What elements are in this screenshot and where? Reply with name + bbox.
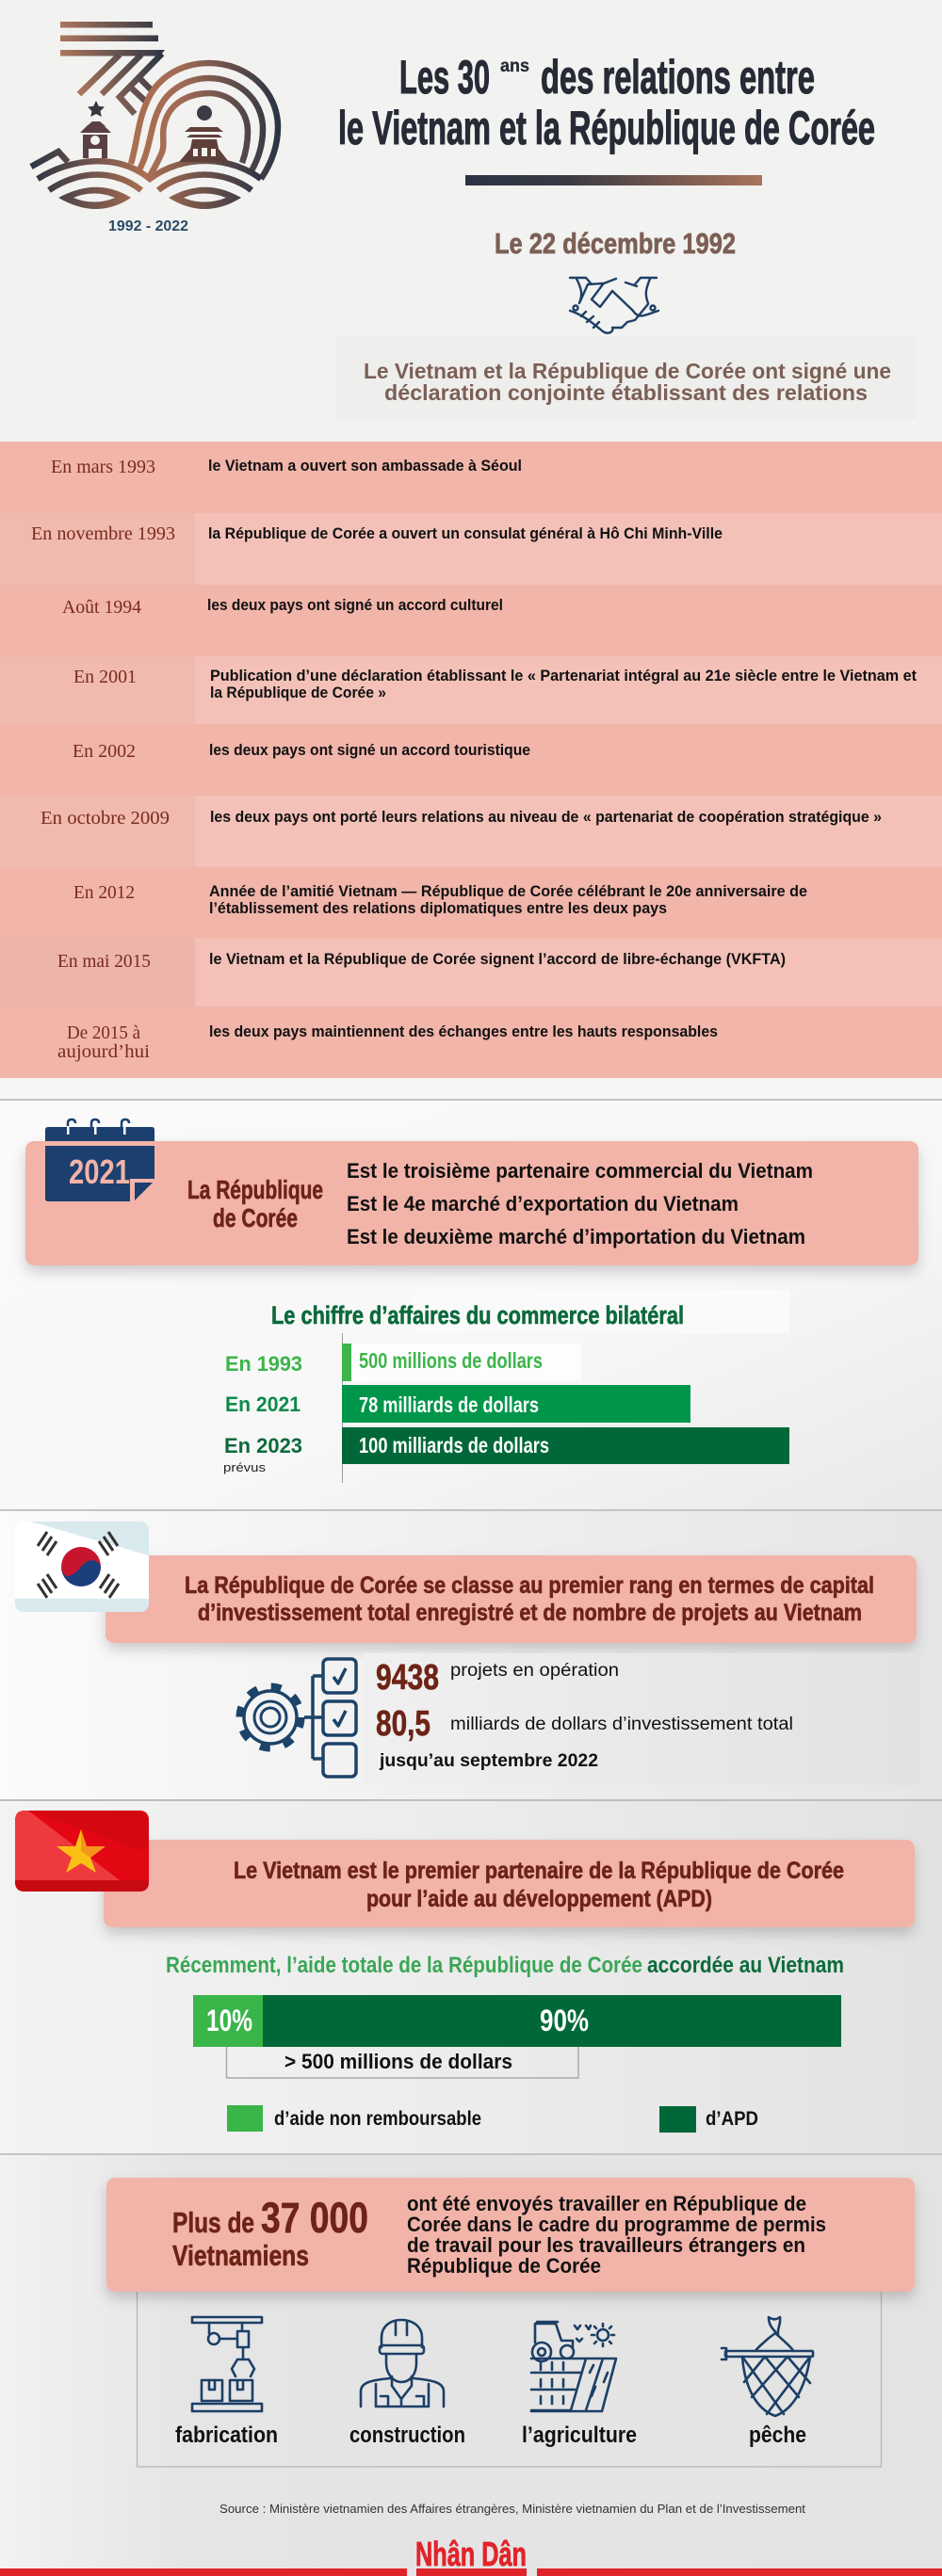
bar: 1993: 500 millions de dollars bbox=[359, 1348, 543, 1373]
legend: ODA bbox=[659, 2106, 758, 2133]
logo: 30th anniversary emblem bbox=[31, 22, 278, 234]
icon: gear and checklist bbox=[239, 1659, 356, 1777]
panel: development aid bbox=[104, 1840, 915, 1927]
timeline: 2001: la République de Corée » bbox=[210, 684, 386, 701]
timeline: 2012: l’établissement des relations diplomatiques entre les deux pays bbox=[209, 899, 667, 917]
title: Les 30 bbox=[399, 51, 490, 104]
timeline: 1993 novembre: En novembre 1993 bbox=[31, 523, 175, 544]
legend: non-refundable aid bbox=[227, 2105, 481, 2132]
chart: aid split bbox=[166, 1953, 844, 2133]
timeline: 2012: Année de l’amitié Vietnam — République de Corée célébrant le 20e anniversaire de bbox=[209, 882, 807, 900]
stat: 9438 projects bbox=[376, 1658, 619, 1698]
timeline: today: De 2015 à bbox=[67, 1022, 140, 1043]
timeline: 2002 bbox=[73, 741, 530, 762]
logo: clock tower bbox=[80, 121, 111, 158]
bar: 2023: prévus bbox=[223, 1460, 267, 1474]
timeline: 1994: Août 1994 bbox=[62, 597, 141, 618]
timeline: 1993 mars: En mars 1993 bbox=[51, 457, 155, 477]
icon: Vietnamese flag bbox=[15, 1811, 149, 1892]
text: partner facts: Est le deuxième marché d’importation du Vietnam bbox=[347, 1225, 805, 1248]
source: Source : Ministère vietnamien des Affaires étrangères, Ministère vietnamien du Plan et de l’Investissement bbox=[219, 2502, 805, 2516]
heading: La République de Corée bbox=[187, 1175, 323, 1232]
logo: taegeuk bbox=[197, 105, 212, 121]
bar: 2021 bbox=[225, 1385, 690, 1423]
panel: timeline bbox=[0, 442, 942, 1078]
text: sector labels: l’agriculture bbox=[522, 2423, 637, 2448]
timeline: 2012: En 2012 bbox=[73, 882, 135, 903]
stat: 80,5 billions: 80,5 bbox=[376, 1704, 430, 1744]
title: ans bbox=[500, 56, 529, 76]
legend: ODA: d’APD bbox=[706, 2108, 758, 2130]
timeline: 1993 novembre bbox=[31, 523, 723, 544]
text: work permit programme: de travail pour les travailleurs étrangers en bbox=[407, 2233, 805, 2257]
bar: 2023 bbox=[223, 1427, 789, 1474]
icon: fishing net bbox=[722, 2317, 813, 2416]
heading: 37 000 Vietnamese: Vietnamiens bbox=[172, 2239, 309, 2272]
text: sector labels: pêche bbox=[749, 2423, 806, 2448]
bar: 1993: En 1993 bbox=[225, 1352, 302, 1376]
icon: fabrication bbox=[192, 2317, 262, 2411]
timeline: 2002: En 2002 bbox=[73, 741, 136, 762]
panel: declaration: déclaration conjointe établissant des relations bbox=[384, 380, 868, 405]
bar: 2021: 78 milliards de dollars bbox=[359, 1393, 539, 1417]
footer: Nhân Dân brand: Nhân Dân bbox=[415, 2535, 527, 2573]
bar: 2023: 100 milliards de dollars bbox=[359, 1433, 549, 1457]
text: sector labels: fabrication bbox=[175, 2423, 278, 2448]
bar: 2021: En 2021 bbox=[225, 1393, 300, 1416]
date heading: Le 22 décembre 1992 bbox=[495, 227, 736, 260]
bar: 90 percent: 90% bbox=[540, 2004, 589, 2037]
icon: construction worker bbox=[361, 2320, 444, 2407]
logo: years: 1992 - 2022 bbox=[108, 218, 188, 234]
chart title: Récemment, l’aide totale de la République de Corée bbox=[166, 1953, 642, 1978]
bar: 2023: En 2023 bbox=[224, 1434, 302, 1457]
text: partner facts: Est le troisième partenaire commercial du Vietnam bbox=[347, 1159, 813, 1183]
stat: 80,5 billions bbox=[376, 1704, 793, 1744]
timeline: 2015: le Vietnam et la République de Corée signent l’accord de libre-échange (VKFTA) bbox=[209, 950, 786, 968]
timeline: 2015: En mai 2015 bbox=[57, 951, 151, 972]
timeline: 2001 bbox=[73, 667, 917, 701]
timeline: 2001: Publication d’une déclaration établissant le « Partenariat intégral au 21e siècle entre le Vietnam et bbox=[210, 667, 917, 684]
bar: 1993 bbox=[225, 1344, 543, 1381]
panel: declaration bbox=[336, 337, 916, 419]
timeline: 2009 bbox=[41, 808, 882, 829]
bar: 10 percent: 10% bbox=[206, 2004, 252, 2037]
text: partner facts: Est le 4e marché d’exportation du Vietnam bbox=[347, 1192, 739, 1216]
timeline: 2009: les deux pays ont porté leurs relations au niveau de « partenariat de coopération stratégique » bbox=[210, 808, 882, 826]
timeline: 2012 bbox=[73, 882, 807, 917]
timeline: 2001: En 2001 bbox=[73, 667, 137, 687]
bracket: amount bbox=[226, 2047, 578, 2078]
text: work permit programme: République de Corée bbox=[407, 2254, 601, 2278]
stat: date: jusqu’au septembre 2022 bbox=[379, 1751, 598, 1771]
icon: calendar 2021: 2021 bbox=[69, 1152, 130, 1191]
heading: 37 000 Vietnamese: 37 000 bbox=[261, 2194, 368, 2242]
timeline: 1993 mars bbox=[51, 457, 522, 477]
panel: development aid: pour l’aide au développement (APD) bbox=[366, 1886, 712, 1912]
timeline: today: les deux pays maintiennent des échanges entre les hauts responsables bbox=[209, 1022, 718, 1040]
timeline: 2015 bbox=[57, 950, 786, 972]
stat: 9438 projects: 9438 bbox=[376, 1658, 439, 1698]
title underline bar bbox=[465, 175, 762, 185]
text: sector labels: construction bbox=[349, 2423, 465, 2448]
icon: handshake bbox=[570, 278, 658, 333]
timeline: 1993 novembre: la République de Corée a ouvert un consulat général à Hô Chi Minh-Ville bbox=[208, 524, 723, 542]
icon: agriculture bbox=[531, 2322, 616, 2411]
timeline: 1993 mars: le Vietnam a ouvert son ambassade à Séoul bbox=[208, 457, 522, 475]
timeline: 1994: les deux pays ont signé un accord culturel bbox=[207, 596, 503, 614]
timeline: today bbox=[57, 1022, 718, 1062]
footer: Nhân Dân brand bbox=[0, 2535, 942, 2576]
panel: investment bbox=[106, 1555, 917, 1643]
timeline: 2009: En octobre 2009 bbox=[41, 808, 170, 829]
timeline: 2002: les deux pays ont signé un accord touristique bbox=[209, 741, 530, 759]
panel: sectors frame bbox=[138, 2278, 882, 2467]
panel: development aid: Le Vietnam est le premier partenaire de la République de Corée bbox=[234, 1858, 844, 1884]
stat: 80,5 billions: milliards de dollars d’investissement total bbox=[450, 1715, 793, 1734]
legend: non-refundable aid: d’aide non remboursable bbox=[274, 2108, 481, 2130]
panel: investment stats bbox=[239, 1653, 919, 1785]
text: sector labels bbox=[175, 2423, 806, 2448]
text: partner facts bbox=[347, 1159, 813, 1248]
bracket: amount: > 500 millions de dollars bbox=[284, 2050, 512, 2073]
timeline: 1994 bbox=[62, 596, 503, 618]
heading: La République de Corée: La République bbox=[187, 1175, 323, 1204]
title bbox=[338, 51, 875, 154]
text: work permit programme: Corée dans le cadre du programme de permis bbox=[407, 2213, 826, 2236]
logo: korean gate bbox=[179, 127, 229, 162]
logo: star bbox=[88, 101, 105, 117]
panel: trade partner bbox=[25, 1141, 918, 1265]
panel: workers bbox=[106, 2178, 915, 2292]
bar: 10 percent bbox=[193, 1995, 263, 2047]
heading: La République de Corée: de Corée bbox=[213, 1203, 298, 1232]
bar chart: bilateral trade bbox=[223, 1290, 789, 1483]
chart title: accordée au Vietnam bbox=[647, 1953, 844, 1978]
icon: Korean flag bbox=[15, 1521, 149, 1612]
icon: calendar 2021 bbox=[45, 1119, 154, 1201]
stat: 9438 projects: projets en opération bbox=[450, 1661, 619, 1681]
bar: 90 percent bbox=[263, 1995, 841, 2047]
heading: 37 000 Vietnamese: Plus de bbox=[172, 2206, 254, 2239]
timeline: today: aujourd’hui bbox=[57, 1041, 150, 1062]
chart title: Le chiffre d’affaires du commerce bilatéral bbox=[271, 1301, 684, 1329]
panel: declaration: Le Vietnam et la République de Corée ont signé une bbox=[364, 359, 891, 383]
text: work permit programme: ont été envoyés travailler en République de bbox=[407, 2192, 806, 2215]
text: work permit programme bbox=[407, 2192, 826, 2278]
heading: 37 000 Vietnamese bbox=[172, 2194, 368, 2272]
